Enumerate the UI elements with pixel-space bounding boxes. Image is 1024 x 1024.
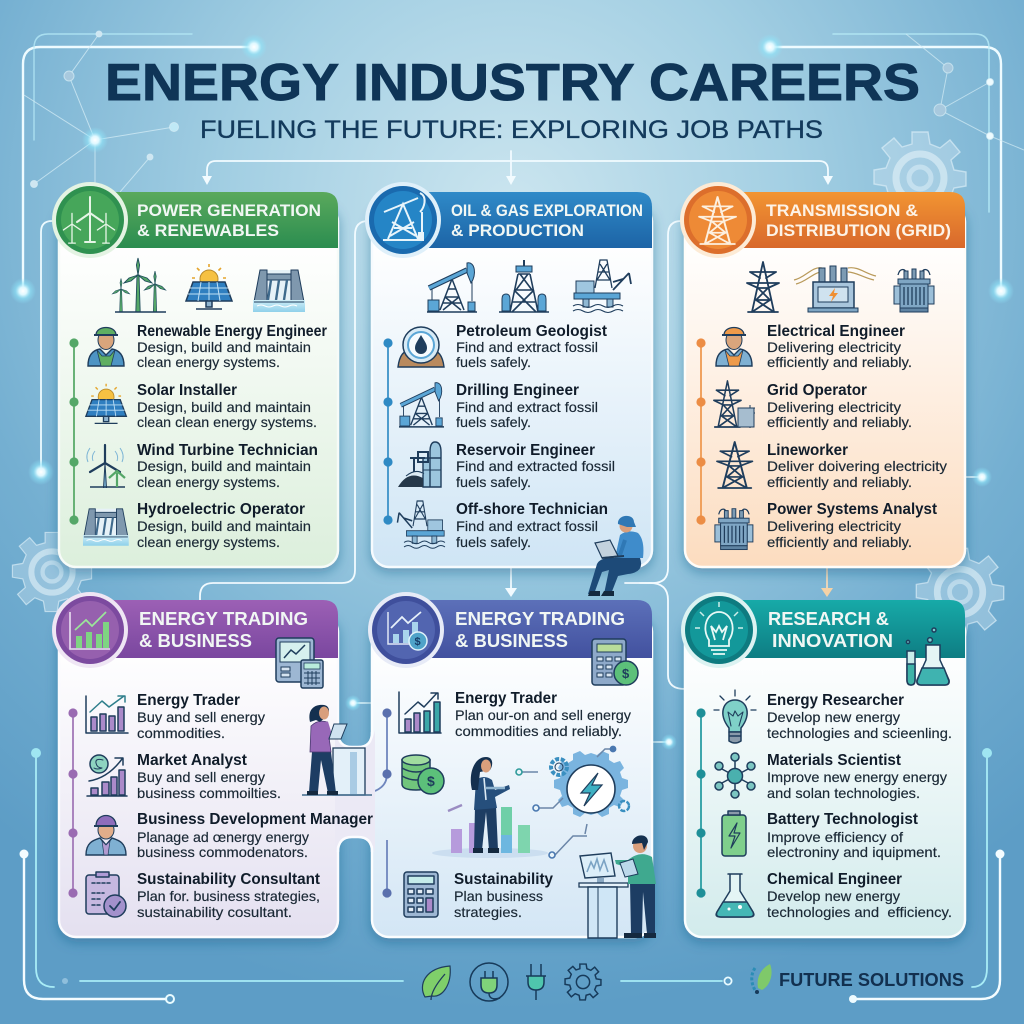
job text [454, 690, 631, 920]
panel header [90, 192, 338, 248]
job text: fuels safely. [456, 414, 531, 430]
job text: Energy Trader [137, 692, 240, 709]
decorative gear: top right [874, 132, 966, 224]
job text: Power Systems Analyst [767, 501, 937, 518]
badge: pylon [680, 182, 756, 258]
icon row [112, 258, 305, 312]
job text: Sustainability Consultant [137, 871, 320, 888]
diagram: energy gear [516, 746, 629, 858]
timeline [68, 708, 78, 898]
job text: technologies and efficiency. [767, 904, 952, 920]
job text [767, 692, 952, 920]
job text: Design, build and maintain [137, 399, 311, 415]
job text: Materials Scientist [767, 752, 901, 769]
network decoration: top right [906, 34, 1024, 150]
job text: Hydroelectric Operator [137, 501, 305, 518]
job text: Planage ad œnergy energy [137, 829, 309, 845]
job text: efficiently and reliably. [767, 414, 912, 430]
heading [768, 609, 893, 651]
job text: Electrical Engineer [767, 323, 905, 340]
panel: power generation [52, 182, 338, 567]
figure: technician with laptop [588, 516, 643, 596]
job icons [83, 328, 129, 546]
job text: Design, build and maintain [137, 458, 311, 474]
job text: strategies. [454, 904, 522, 920]
job text: Plan for. business strategies, [137, 888, 320, 904]
job text: Delivering electricity [767, 339, 901, 355]
job text: Find and extract fossil [456, 399, 598, 415]
job text [767, 323, 947, 550]
job text: efficiently and reliably. [767, 534, 912, 550]
heading: ENERGY TRADING [455, 609, 625, 629]
job text [456, 323, 615, 550]
timeline [69, 338, 79, 525]
heading: & BUSINESS [139, 631, 252, 651]
job text: Renewable Energy Engineer [137, 323, 327, 340]
figure: presenter [471, 757, 510, 853]
job text: Battery Technologist [767, 811, 918, 828]
job text: fuels safely. [456, 354, 531, 370]
job text: clean energy systems. [137, 534, 280, 550]
job icons [399, 692, 444, 917]
heading: & PRODUCTION [451, 222, 584, 240]
badge: bulb [681, 592, 757, 668]
heading: OIL & GAS EXPLORATION [451, 202, 643, 220]
job text: Energy Researcher [767, 692, 904, 709]
job text: Buy and sell energy [137, 769, 265, 785]
decorative gear: right [916, 548, 1004, 636]
job text: Off-shore Technician [456, 501, 608, 518]
job icons [86, 696, 128, 917]
job text: business commoilties. [137, 785, 281, 801]
timeline [383, 338, 393, 525]
badge: wind turbines [52, 182, 128, 258]
timeline [375, 708, 392, 898]
heading [766, 202, 951, 240]
job text: clean clean energy systems. [137, 414, 317, 430]
job text: technologies and scieenling. [767, 725, 952, 741]
arrows: top distribution [202, 151, 833, 185]
job icons: $ [427, 773, 435, 789]
job text [137, 692, 320, 920]
job text: Buy and sell energy [137, 709, 265, 725]
job text: Market Analyst [137, 752, 247, 769]
icon: calculator and coin: $ [622, 666, 630, 681]
job text: sustainability cosultant. [137, 904, 292, 920]
chart bars [432, 805, 548, 858]
job text: Drilling Engineer [456, 382, 579, 399]
job text: Delivering electricity [767, 518, 901, 534]
job text: electroniny and iquipment. [767, 844, 941, 860]
job text: commodities and reliably. [455, 723, 622, 739]
panel header [90, 600, 338, 658]
bridge between trading panels [335, 730, 375, 853]
job text: Design, build and maintain [137, 339, 311, 355]
badge: chart [52, 592, 128, 668]
job text: Wind Turbine Technician [137, 442, 318, 459]
decorative gear: left [12, 532, 92, 612]
icon: leaf [422, 966, 450, 1000]
panel header [403, 192, 652, 248]
job text: efficiently and reliably. [767, 354, 912, 370]
job text: Plan business [454, 888, 543, 904]
logo [752, 964, 964, 994]
job text: clean energy systems. [137, 354, 280, 370]
job text: and solan technologies. [767, 785, 920, 801]
panel: energy trading left [52, 592, 338, 937]
badge: chart and coin: $ [414, 636, 421, 648]
icon: flasks [906, 628, 949, 685]
job text: Design, build and maintain [137, 518, 311, 534]
icon: plug [526, 964, 546, 1000]
job text: Petroleum Geologist [456, 323, 607, 340]
heading: TRANSMISSION & [766, 202, 918, 220]
icon: plug in circle [470, 963, 508, 1001]
subtitle: FUELING THE FUTURE: EXPLORING JOB PATHS [200, 116, 823, 144]
job text: Develop new energy [767, 888, 900, 904]
panel header [406, 600, 652, 658]
timeline [696, 708, 706, 898]
job text: fuels safely. [456, 474, 531, 490]
figure: analyst with tablet and chart [302, 705, 372, 795]
job text: Deliver doivering electricity [767, 458, 947, 474]
Business Development Manager title: Business Development Manager [137, 811, 373, 828]
job text: Find and extract fossil [456, 339, 598, 355]
heading: RESEARCH & [768, 609, 889, 629]
job text: efficiently and reliably. [767, 474, 912, 490]
panel: transmission [680, 182, 965, 567]
icon: monitor and calculator [276, 638, 323, 688]
job text: Reservoir Engineer [456, 442, 595, 459]
title: ENERGY INDUSTRY CAREERS [105, 54, 920, 112]
heading: & BUSINESS [455, 631, 568, 651]
job text: business commodenators. [137, 844, 308, 860]
job text: Sustainability [454, 871, 553, 888]
job text: Lineworker [767, 442, 848, 459]
timeline [696, 338, 706, 525]
heading [137, 202, 321, 240]
panel header [718, 192, 965, 248]
job text: Improve new energy energy [767, 769, 947, 785]
job text: Chemical Engineer [767, 871, 902, 888]
wordmark: FUTURE SOLUTIONS [779, 969, 964, 990]
badge: chart and coin [368, 592, 444, 668]
job text: Energy Trader [455, 690, 557, 707]
job text: Solar Installer [137, 382, 237, 399]
job text: Delivering electricity [767, 399, 901, 415]
icon row [747, 262, 934, 312]
job text: Plan our-on and sell energy [455, 707, 631, 723]
job text: fuels safely. [456, 534, 531, 550]
heading [455, 609, 625, 651]
footer icons [422, 963, 601, 1001]
job text: Grid Operator [767, 382, 867, 399]
heading: DISTRIBUTION (GRID) [766, 222, 951, 240]
icon row [427, 260, 631, 312]
panel: research [681, 592, 965, 937]
heading [139, 609, 308, 651]
panel: oil and gas [365, 182, 652, 567]
badge: pumpjack [365, 182, 441, 258]
heading: & RENEWABLES [137, 222, 279, 240]
heading: POWER GENERATION [137, 202, 321, 220]
heading: INNOVATION [772, 631, 893, 651]
panel: energy trading center [368, 592, 656, 938]
job text: Improve efficiency of [767, 829, 903, 845]
figure: analyst with monitor [579, 835, 656, 938]
heading [451, 202, 643, 240]
heading: ENERGY TRADING [139, 609, 308, 629]
job text: clean energy systems. [137, 474, 280, 490]
job text: Develop new energy [767, 709, 900, 725]
job icons [714, 328, 755, 550]
icon: gear [565, 964, 601, 1000]
connectors between rows [200, 221, 833, 689]
job text: commodities. [137, 725, 225, 741]
job text [137, 323, 327, 550]
network decoration: top left [24, 31, 178, 192]
job text: Find and extracted fossil [456, 458, 615, 474]
job icons [714, 690, 756, 917]
job icons [397, 327, 445, 548]
panel header [719, 600, 965, 658]
icon: calculator and coin [592, 639, 638, 685]
job text: Find and extract fossil [456, 518, 598, 534]
